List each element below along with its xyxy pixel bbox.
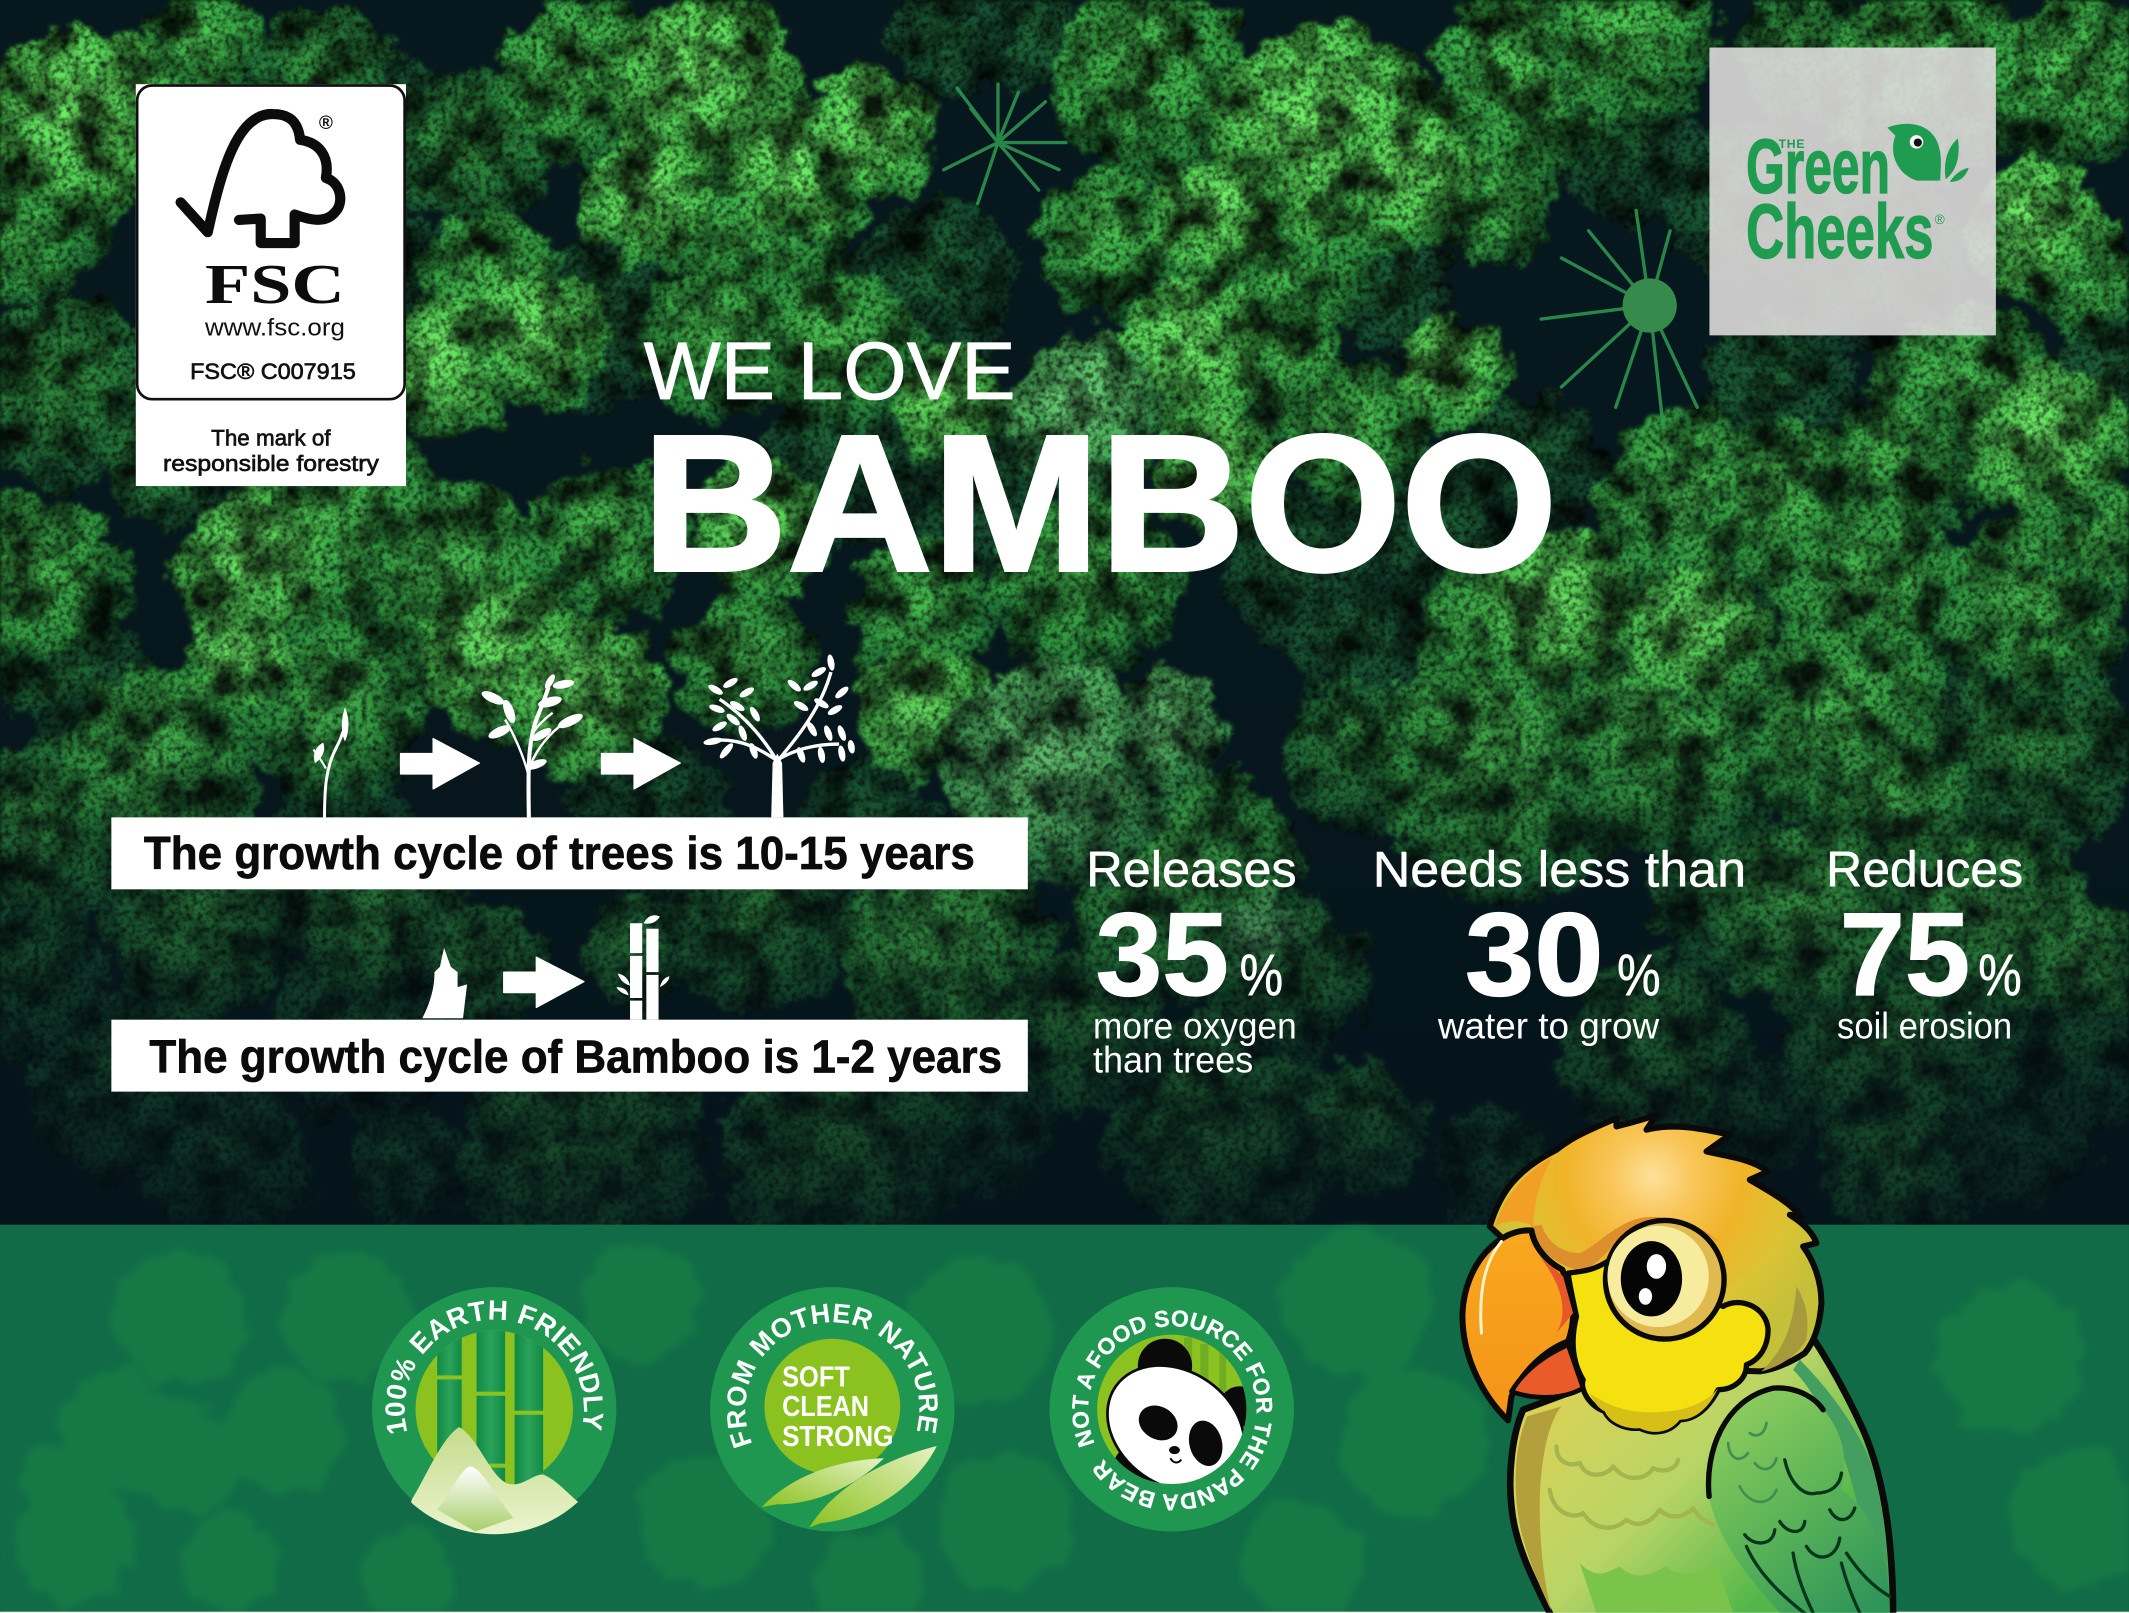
tree growth icons (314, 654, 856, 817)
parrot face (1568, 1260, 1768, 1432)
bamboo growth icons (422, 915, 669, 1020)
parrot body (1510, 1333, 1893, 1613)
icon: logo bird (1887, 124, 1969, 182)
badge text (405, 1320, 584, 1499)
logo wordmark: Green (1746, 124, 1890, 210)
logo wordmark: Cheeks (1746, 189, 1933, 275)
stat: releases 35%: % (1240, 943, 1283, 1008)
badge: from mother nature (710, 1287, 954, 1532)
icon: palm tree crowns (944, 84, 1697, 428)
icon: FSC checkmark tree (181, 114, 340, 243)
title line: bamboo: BAMBOO (642, 395, 1557, 612)
parrot mascot (1462, 1115, 1893, 1613)
stat: releases 35%: Releases (1086, 842, 1297, 898)
arrow 2 (602, 739, 680, 789)
stat: releases 35%: than trees (1093, 1040, 1253, 1081)
parrot eye (1605, 1220, 1724, 1339)
soft clean strong: SOFT (782, 1361, 851, 1393)
stat: needs less than 30%: Needs less than (1373, 842, 1746, 898)
parrot wing feather lines (1745, 1460, 1890, 1613)
stat: releases 35%: 35 (1096, 889, 1229, 1021)
soft clean strong: CLEAN (782, 1391, 869, 1423)
forest background photo (0, 0, 2129, 1276)
FSC registered mark: ® (319, 113, 333, 134)
badge: from mother nature: FROM MOTHER NATURE (727, 1304, 938, 1448)
stat: reduces 75%: soil erosion (1837, 1006, 2012, 1047)
stat: needs less than 30%: 30 (1465, 889, 1604, 1021)
badge text (745, 1322, 919, 1496)
stat: needs less than 30%: water to grow (1437, 1006, 1660, 1047)
soft clean strong (782, 1361, 893, 1453)
stat: reduces 75% (1826, 842, 2023, 1047)
icon: grown tree (703, 654, 856, 817)
parrot back shade (1516, 1406, 1561, 1611)
logo wordmark: ® (1935, 212, 1945, 227)
icon: mountains (411, 1427, 578, 1534)
white caption bar: bamboo (111, 1020, 1028, 1092)
parrot head shade (1761, 1286, 1807, 1371)
white caption bar: bamboo: The growth cycle of Bamboo is 1-2 years (149, 1031, 1002, 1083)
badge: 100% earth friendly: 100% EARTH FRIENDLY (385, 1300, 604, 1434)
icon: bamboo shoot (422, 948, 467, 1018)
stat: needs less than 30% (1373, 842, 1746, 1047)
parrot wing (1708, 1388, 1890, 1613)
white caption bar: trees: The growth cycle of trees is 10-15 years (144, 827, 975, 879)
FSC tagline: The mark of (211, 425, 331, 450)
icon: bamboo stalks (437, 1330, 544, 1484)
parrot head (1490, 1115, 1821, 1371)
FSC certification label (136, 84, 406, 486)
FSC tagline (163, 425, 380, 476)
icon: bamboo leaves (762, 1446, 937, 1527)
logo wordmark (1746, 124, 1945, 275)
icon: bamboo stalks (616, 915, 669, 1020)
soft clean strong: STRONG (782, 1421, 893, 1453)
bottom green band (0, 1225, 2129, 1613)
parrot chest feather lines (1550, 1446, 1713, 1528)
logo wordmark: THE (1779, 137, 1804, 151)
FSC code: FSC® C007915 (190, 359, 356, 384)
icon: sapling (480, 673, 585, 817)
badge: 100% earth friendly (372, 1287, 616, 1534)
title (642, 326, 1557, 612)
stat: releases 35% (1086, 842, 1297, 1081)
FSC website: www.fsc.org (204, 314, 345, 341)
badge: not a food source: NOT A FOOD SOURCE FOR THE PANDA BEAR (1072, 1310, 1272, 1510)
title line: we love: WE LOVE (644, 326, 1016, 417)
Green Cheeks logo panel (1709, 48, 1996, 335)
FSC wordmark: FSC (205, 254, 345, 316)
FSC tagline: responsible forestry (163, 451, 380, 476)
stat: reduces 75%: 75 (1840, 889, 1970, 1021)
parrot lower beak (1511, 1345, 1583, 1397)
arrow 1 (401, 739, 479, 789)
stat: needs less than 30%: % (1617, 943, 1661, 1008)
badge text (1088, 1326, 1256, 1495)
white caption bar: trees (111, 817, 1028, 889)
stat: releases 35%: more oxygen (1093, 1006, 1297, 1047)
parrot beak (1462, 1230, 1573, 1420)
arrow 3 (504, 957, 584, 1007)
stat: reduces 75%: Reduces (1826, 842, 2023, 898)
stat: reduces 75%: % (1978, 943, 2022, 1008)
icon: panda (1106, 1338, 1246, 1484)
parrot brow (1531, 1217, 1720, 1270)
icon: seedling (314, 707, 348, 817)
